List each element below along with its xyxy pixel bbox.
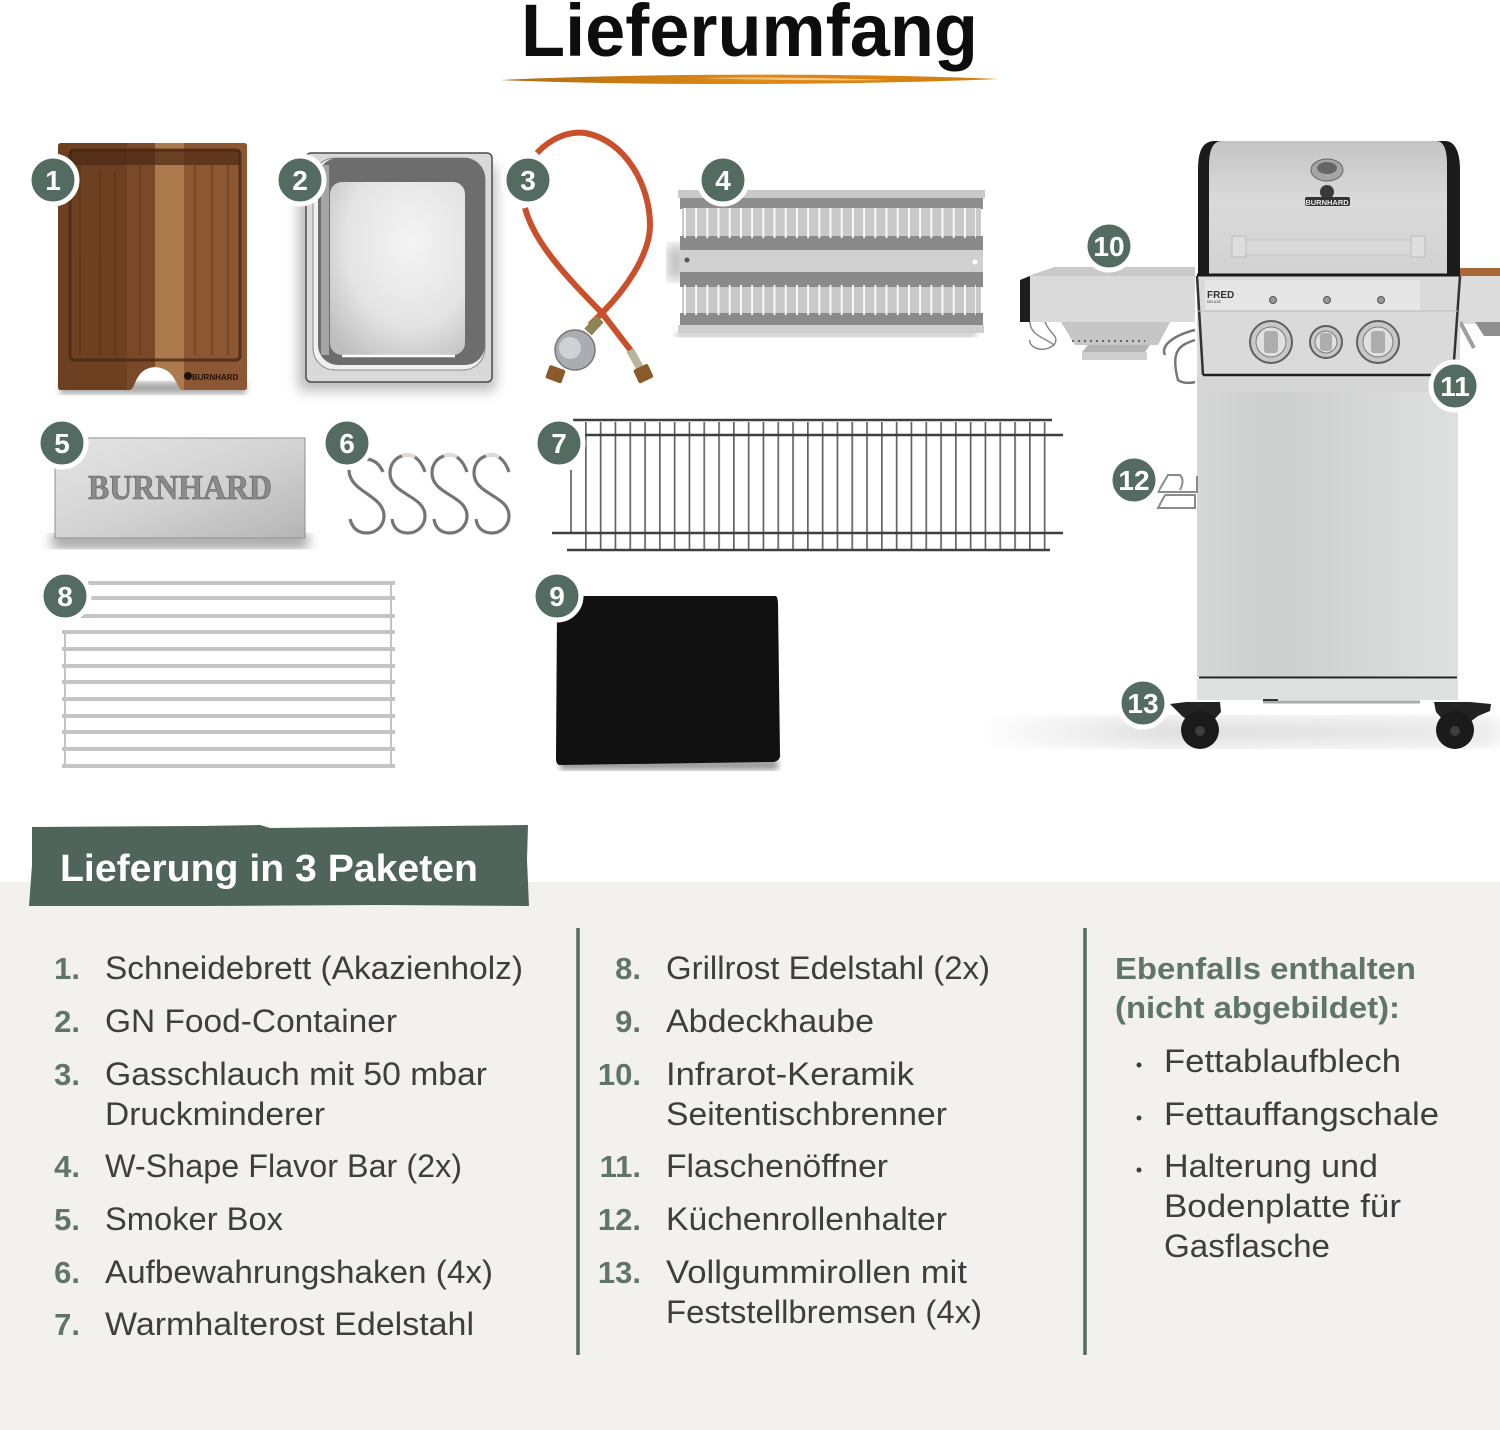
bullet points: Bodenplatte für	[1164, 1188, 1401, 1224]
list: items 1 to 7: 7.	[54, 1307, 80, 1342]
lid	[1198, 141, 1460, 275]
subheading: (nicht abgebildet):	[1115, 990, 1400, 1025]
subheading: Ebenfalls enthalten	[1115, 951, 1416, 986]
badge 3: 3	[520, 165, 536, 196]
banner: Lieferung in 3 Paketen	[29, 825, 529, 906]
badge 9	[533, 572, 581, 620]
list: items 8 to 13: 10.	[598, 1057, 641, 1092]
list: items 8 to 13: Feststellbremsen (4x)	[666, 1294, 982, 1330]
right side table	[1460, 268, 1500, 348]
item 5: smoker box: BURNHARD	[88, 468, 272, 507]
badge 11	[1431, 362, 1479, 410]
control panel	[1197, 274, 1460, 378]
badge 8: 8	[57, 581, 73, 612]
item 3: gas hose with regulator	[525, 133, 654, 384]
badge 4	[699, 156, 747, 204]
badge 1: 1	[45, 165, 61, 196]
badge 6	[323, 419, 371, 467]
list: items 1 to 7	[54, 950, 523, 1342]
badge 13: 13	[1127, 688, 1159, 719]
badge 11: 11	[1440, 371, 1470, 402]
list: items 8 to 13	[598, 950, 990, 1330]
bullet points: Gasflasche	[1164, 1228, 1330, 1264]
control panel: FRED	[1207, 290, 1234, 301]
item 8: grill grate	[62, 583, 395, 766]
list: items 8 to 13: Seitentischbrenner	[666, 1096, 947, 1132]
badge 3	[504, 156, 552, 204]
badge 7: 7	[551, 428, 567, 459]
left wheel	[1170, 702, 1221, 749]
item 5: smoker box	[52, 438, 308, 548]
badge 10: 10	[1093, 231, 1125, 262]
list: items 8 to 13: Vollgummirollen mit	[666, 1254, 967, 1290]
item 1: cutting board: BURNHARD	[192, 373, 238, 382]
list: items 8 to 13: Abdeckhaube	[666, 1003, 874, 1039]
item 1: cutting board	[58, 143, 247, 394]
list: items 8 to 13: 8.	[615, 951, 641, 986]
list: items 1 to 7: Warmhalterost Edelstahl	[105, 1306, 474, 1342]
towel holder	[1158, 475, 1197, 508]
badge 2: 2	[292, 165, 308, 196]
subheading	[1115, 951, 1416, 1025]
badge 8	[41, 572, 89, 620]
list: items 8 to 13: Küchenrollenhalter	[666, 1201, 947, 1237]
burner knob right	[1357, 321, 1399, 363]
list: items 1 to 7: Smoker Box	[105, 1201, 283, 1237]
bottom background panel	[0, 882, 1500, 1430]
item 9: black cover	[556, 596, 780, 770]
control panel: DELUXE	[1207, 300, 1222, 304]
badge 5	[38, 419, 86, 467]
list: items 1 to 7: Aufbewahrungshaken (4x)	[105, 1254, 493, 1290]
bullet points	[1136, 1043, 1439, 1264]
badge 2	[276, 156, 324, 204]
list: items 8 to 13: Grillrost Edelstahl (2x)	[666, 950, 990, 986]
list: items 1 to 7: 5.	[54, 1202, 80, 1237]
column dividers	[578, 928, 1085, 1355]
badge 7	[535, 419, 583, 467]
item: grill	[980, 141, 1500, 749]
item 2: GN food container	[298, 153, 496, 391]
item 6: hooks	[349, 455, 509, 533]
item 7: warming rack	[552, 420, 1063, 550]
burner knob left	[1250, 321, 1292, 363]
list: items 1 to 7: 3.	[54, 1057, 80, 1092]
burner knob centre	[1310, 326, 1342, 358]
badge 5: 5	[54, 428, 70, 459]
badge 12: 12	[1118, 465, 1150, 496]
left side burner table	[1020, 267, 1195, 383]
list: items 1 to 7: Gasschlauch mit 50 mbar	[105, 1056, 487, 1092]
item 4: W-shape flavor bars	[668, 190, 985, 337]
badge 6: 6	[339, 428, 355, 459]
list: items 8 to 13: Infrarot-Keramik	[666, 1056, 915, 1092]
badge 4: 4	[715, 165, 731, 196]
list: items 1 to 7: 2.	[54, 1004, 80, 1039]
floor shadow	[980, 718, 1500, 746]
lid: BURNHARD	[1305, 198, 1349, 207]
list: items 1 to 7: GN Food-Container	[105, 1003, 397, 1039]
list: items 1 to 7: 4.	[54, 1149, 80, 1184]
bullet points: Fettablaufblech	[1164, 1043, 1401, 1079]
badge 10	[1085, 222, 1133, 270]
list: items 1 to 7: Druckminderer	[105, 1096, 325, 1132]
bullet points: Halterung und	[1164, 1148, 1378, 1184]
list: items 1 to 7: 6.	[54, 1255, 80, 1290]
list: items 1 to 7: Schneidebrett (Akazienholz)	[105, 950, 523, 986]
list: also included	[1115, 951, 1439, 1264]
number badges	[29, 156, 1479, 727]
list: items 8 to 13: 12.	[598, 1202, 641, 1237]
list: items 1 to 7: W-Shape Flavor Bar (2x)	[105, 1148, 462, 1184]
list: items 8 to 13: 11.	[600, 1149, 641, 1184]
badge 9: 9	[549, 581, 565, 612]
badge 1	[29, 156, 77, 204]
badge 13	[1119, 679, 1167, 727]
banner: Lieferung in 3 Paketen: Lieferung in 3 Paketen	[60, 848, 478, 890]
cabinet door	[1197, 378, 1459, 702]
list: items 8 to 13: Flaschenöffner	[666, 1148, 888, 1184]
list: items 1 to 7: 1.	[54, 951, 80, 986]
badge 12	[1110, 456, 1158, 504]
list: items 8 to 13: 13.	[598, 1255, 641, 1290]
right wheel	[1434, 702, 1491, 749]
list: items 8 to 13: 9.	[615, 1004, 641, 1039]
bullet points: Fettauffangschale	[1164, 1096, 1439, 1132]
